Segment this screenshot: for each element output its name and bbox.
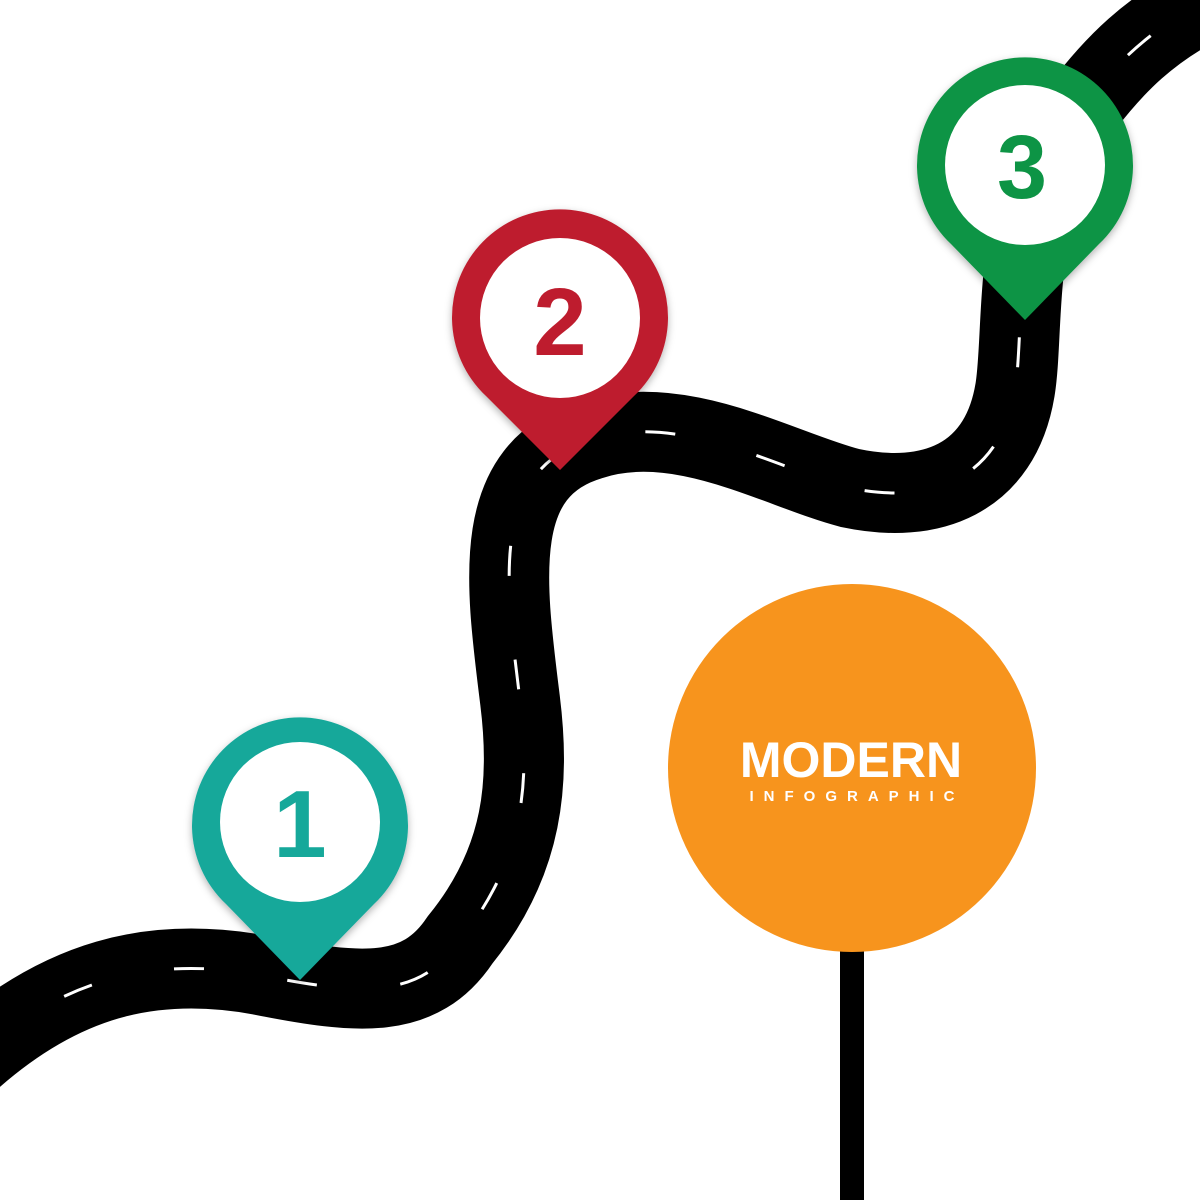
pin 3 [917, 57, 1133, 320]
pin 2: 2 [533, 269, 587, 376]
pin 3: 3 [997, 118, 1047, 218]
sign pole [840, 945, 864, 1200]
pin 1 [192, 717, 408, 980]
pin 1: 1 [273, 771, 327, 878]
sign: modern infographic: MODERN [740, 732, 962, 788]
sign: modern infographic [668, 584, 1036, 952]
sign: modern infographic: INFOGRAPHIC [750, 788, 964, 805]
pin 2 [452, 209, 668, 470]
